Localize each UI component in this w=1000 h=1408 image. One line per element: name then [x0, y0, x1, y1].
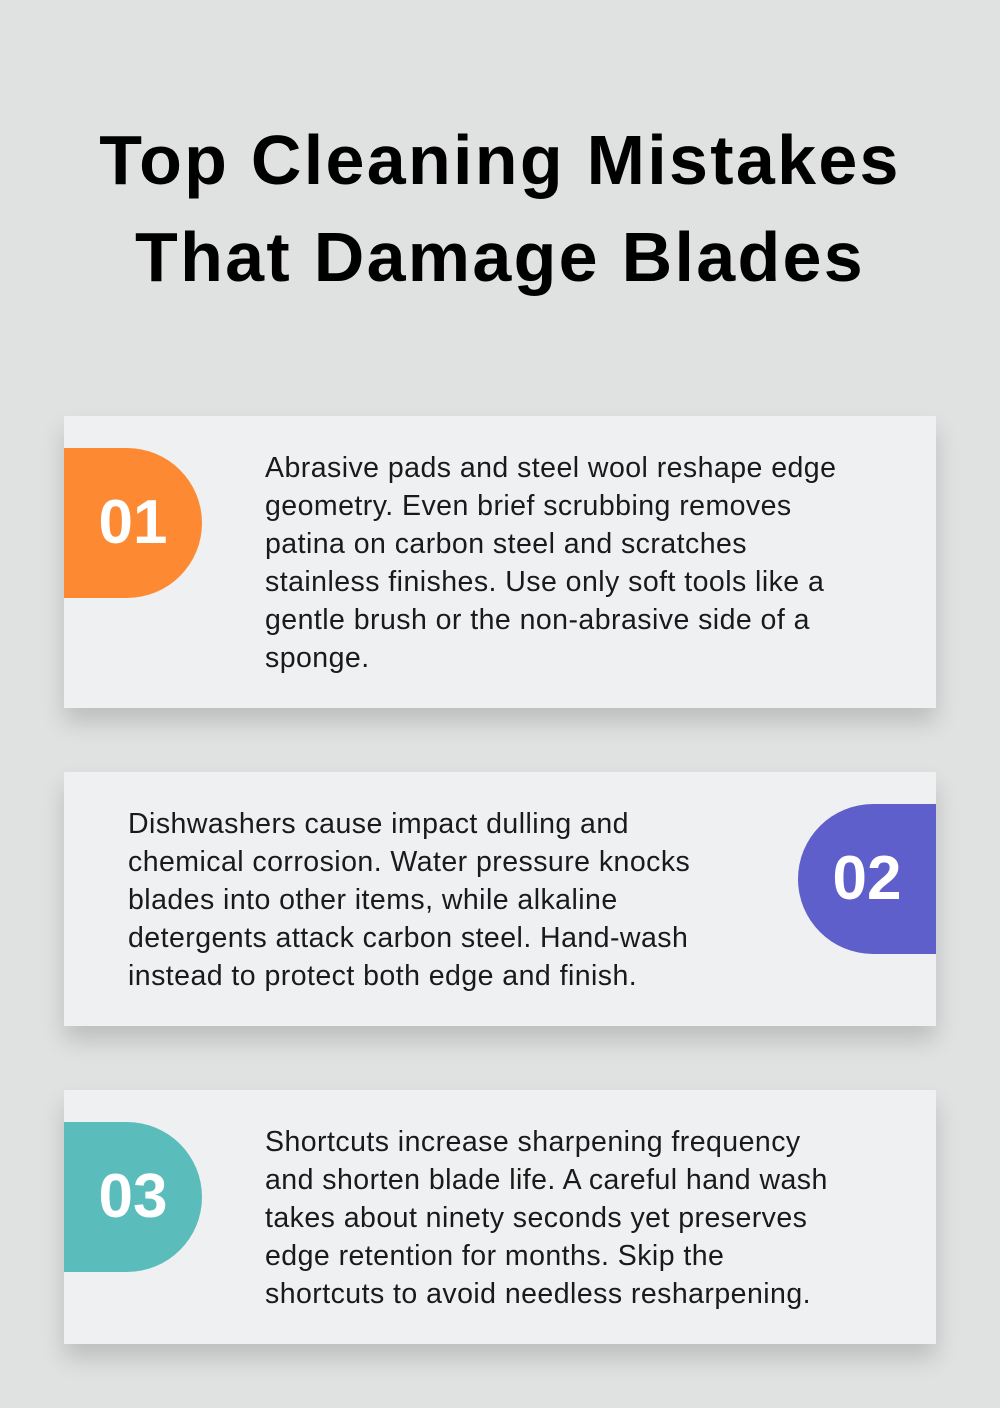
badge 02: 02 — [833, 844, 901, 913]
title — [99, 121, 901, 296]
text 02: chemical corrosion. Water pressure knocks — [128, 846, 690, 878]
panel: mistake 01 — [64, 416, 936, 708]
badge 01: 01 — [99, 488, 167, 557]
text 01: geometry. Even brief scrubbing removes — [265, 490, 792, 522]
text 03: edge retention for months. Skip the — [265, 1240, 724, 1272]
text 03: takes about ninety seconds yet preserves — [265, 1202, 807, 1234]
title: Top Cleaning Mistakes — [99, 121, 901, 199]
text 01: stainless finishes. Use only soft tools like a — [265, 566, 824, 598]
badge 02 — [798, 804, 936, 954]
text 01: sponge. — [265, 642, 370, 674]
text 02: instead to protect both edge and finish. — [128, 960, 637, 992]
text 03: shortcuts to avoid needless resharpening. — [265, 1278, 811, 1310]
panel: mistake 02 — [64, 772, 936, 1026]
text 01: gentle brush or the non-abrasive side of a — [265, 604, 810, 636]
badge 01 — [64, 448, 202, 598]
text 01: Abrasive pads and steel wool reshape edge — [265, 452, 836, 484]
text 03: and shorten blade life. A careful hand wash — [265, 1164, 828, 1196]
text 01: patina on carbon steel and scratches — [265, 528, 747, 560]
text 03 — [265, 1126, 828, 1310]
text 02: Dishwashers cause impact dulling and — [128, 808, 629, 840]
title: That Damage Blades — [135, 218, 865, 296]
panel: mistake 03 — [64, 1090, 936, 1344]
text 01 — [265, 452, 836, 674]
text 03: Shortcuts increase sharpening frequency — [265, 1126, 801, 1158]
text 02 — [128, 808, 690, 992]
text 02: detergents attack carbon steel. Hand-wash — [128, 922, 688, 954]
badge 03 — [64, 1122, 202, 1272]
badge 03: 03 — [99, 1162, 167, 1231]
text 02: blades into other items, while alkaline — [128, 884, 618, 916]
